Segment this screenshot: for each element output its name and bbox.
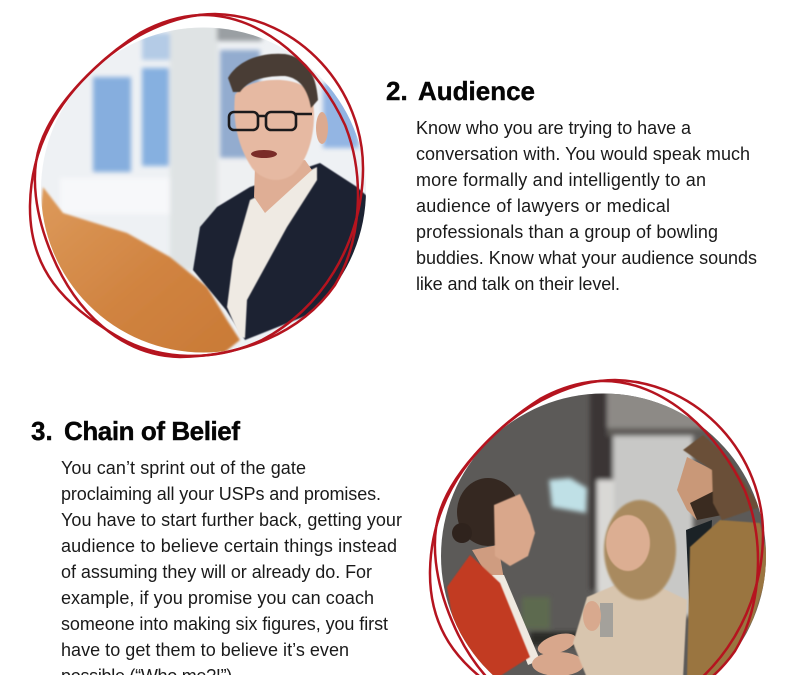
man in tan jacket: [677, 435, 770, 675]
text block: chain of belief body: of assuming they will or already do. For: [61, 562, 372, 582]
decorative red rings around presenter photo: [30, 14, 363, 357]
hair: [228, 54, 318, 108]
photo: presenter in navy blazer: [40, 25, 370, 356]
text block: chain of belief body: You have to start further back, getting your: [61, 510, 402, 530]
text block: audience body: conversation with. You would speak much: [416, 144, 750, 164]
heading: 2. Audience: 2.: [386, 76, 408, 106]
text block: audience body: like and talk on their level.: [416, 274, 620, 294]
text block: chain of belief body: audience to believe certain things instead: [61, 536, 397, 556]
text block: chain of belief body: proclaiming all your USPs and promises.: [61, 484, 381, 504]
text block: chain of belief body: example, if you promise you can coach: [61, 588, 374, 608]
text block: chain of belief body: [61, 458, 402, 675]
woman in red blazer: [447, 478, 584, 675]
text block: chain of belief body: You can’t sprint out of the gate: [61, 458, 306, 478]
heading: 3. Chain of Belief: 3.: [31, 416, 53, 446]
text block: audience body: Know who you are trying to have a: [416, 118, 692, 138]
text block: audience body: more formally and intelligently to an: [416, 170, 706, 190]
heading: 3. Chain of Belief: Chain of Belief: [64, 416, 240, 446]
face: [234, 80, 314, 180]
shirt: [227, 167, 317, 338]
neck: [254, 160, 312, 213]
orange shoulder in foreground: [40, 187, 240, 356]
glasses: [229, 112, 312, 130]
text block: audience body: buddies. Know what your audience sounds: [416, 248, 757, 268]
photo: three people talking: [440, 390, 770, 675]
text block: chain of belief body: someone into making six figures, you first: [61, 614, 388, 634]
text block: audience body: professionals than a group of bowling: [416, 222, 718, 242]
heading: 2. Audience: Audience: [418, 76, 535, 106]
text block: audience body: audience of lawyers or medical: [416, 196, 670, 216]
text block: audience body: [416, 118, 757, 294]
neon sign: [549, 478, 587, 513]
decorative red rings around group photo: [430, 380, 763, 675]
woman in cream sweater: [573, 500, 687, 675]
text block: chain of belief body: have to get them to believe it’s even: [61, 640, 349, 660]
navy blazer: [193, 163, 368, 340]
mouth: [251, 150, 277, 158]
